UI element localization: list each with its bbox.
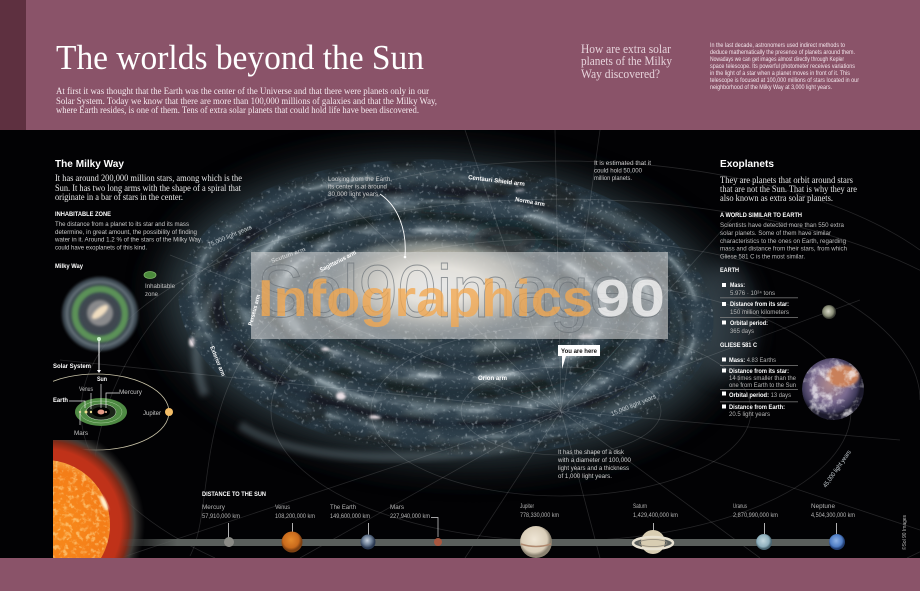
planet: Mercury: Mercury — [202, 504, 226, 511]
arm labels: Orion arm — [478, 376, 507, 382]
subheading: how are planets discovered: planets of the Milky — [581, 54, 673, 68]
heading: Exoplanets — [720, 158, 774, 170]
label: Milky Way map: Milky Way — [55, 263, 84, 270]
solar system diagram: Earth — [53, 397, 68, 404]
dark gap above galactic centre — [470, 226, 540, 254]
Earth data: Orbital period: — [730, 320, 768, 327]
subheading: how are planets discovered: How are extra solar — [581, 42, 672, 56]
inhabitable zone legend — [144, 272, 176, 298]
discovery text: Nowadays we can get images almost directly through Kepler — [710, 57, 844, 63]
planet: Venus — [275, 504, 315, 552]
panel: footer band — [0, 558, 920, 591]
planet: Neptune: Neptune — [811, 503, 836, 510]
similar world text — [720, 222, 847, 260]
pinkish star clusters — [189, 189, 594, 419]
planet: Saturn — [633, 503, 678, 554]
callout: disk shape: It has the shape of a disk — [558, 449, 625, 456]
panel: header band — [0, 0, 920, 130]
similar world text: characteristics to the ones on Earth, regarding — [720, 238, 846, 245]
panel: Exoplanets — [720, 158, 864, 420]
Gliese 581 C data: 14 times smaller than the — [729, 375, 796, 382]
planet: The Earth — [330, 504, 376, 550]
planet: Mercury — [202, 504, 240, 547]
Earth data: 150 million kilometers — [730, 309, 789, 316]
arm labels: Exterior arm — [208, 346, 226, 377]
callout: distance to centre: its center is at around — [328, 184, 387, 190]
discovery text: deduce mathematically the presence of planets around them. — [710, 50, 855, 56]
Gliese 581 C data — [720, 342, 798, 418]
solar system diagram: Venus — [79, 386, 93, 393]
planet: The Earth: The Earth — [330, 504, 357, 511]
galaxy left outer arm — [197, 250, 255, 395]
subheading: a world similar to Earth: A WORLD SIMILAR TO EARTH — [720, 212, 802, 219]
Gliese 581 C data: Distance from Earth: — [729, 404, 785, 411]
subheading: how are planets discovered: Way discovered? — [581, 67, 660, 81]
arm labels: Perseus arm — [248, 294, 262, 327]
callout: disk shape: with a diameter of 100,000 — [557, 457, 631, 464]
Earth data: Distance from its star: — [730, 301, 789, 308]
callout: you are here — [558, 345, 600, 369]
planet: Mars: 227,940,000 km — [390, 513, 430, 520]
distance ring labels: 45,000 light years — [822, 449, 853, 489]
heading: DISTANCE TO THE SUN — [202, 491, 266, 498]
label: Solar System: Solar System — [53, 363, 91, 370]
galactic centre bulge — [330, 236, 545, 332]
arm labels: Norma arm — [515, 197, 545, 208]
intro text — [56, 86, 437, 116]
intro text: where Earth resides, is one of them. Tens of extra solar planets that could hold life have been discovered. — [56, 105, 419, 116]
solar system diagram: Mercury — [119, 389, 143, 396]
icon: Gliese planet — [802, 358, 864, 420]
Earth data: EARTH — [720, 267, 739, 274]
planet: Mercury: 57,910,000 km — [202, 513, 240, 520]
distance ring labels: 75,000 light years — [207, 224, 253, 249]
solar system diagram: Jupiter — [143, 410, 161, 417]
Earth data — [720, 267, 798, 335]
callout: 50,000 million planets: could hold 50,000 — [594, 168, 642, 174]
planet: Saturn: Saturn — [633, 503, 647, 510]
discovery text: neighborhood of the Milky Way at 3,000 light years. — [710, 85, 832, 91]
solar system diagram: Mars — [74, 430, 88, 437]
Gliese 581 C data: Distance from its star: — [729, 368, 789, 375]
arm labels: Scutum arm — [271, 247, 307, 265]
subheading: how are planets discovered — [581, 42, 673, 81]
inhabitable zone text: The distance from a planet to its star and its mass — [55, 221, 190, 228]
title: The worlds beyond the Sun — [56, 38, 424, 77]
callout: disk shape: light years and a thickness — [558, 465, 630, 472]
milky way description: It has around 200,000 million stars, among which is the — [55, 173, 242, 183]
callout: distance to centre: Looking from the Earth, — [328, 176, 392, 183]
Gliese 581 C data: Orbital period: 13 days — [729, 392, 791, 399]
distance ring labels — [207, 224, 853, 489]
sun illustration — [53, 440, 143, 558]
discovery text: In the last decade, astronomers used indirect methods to — [710, 43, 846, 49]
watermark: Infographics — [258, 270, 593, 328]
planet: Uranus: 2,870,990,000 km — [733, 512, 778, 519]
planet: The Earth: 149,600,000 km — [330, 513, 370, 520]
similar world text: mass and distance from their stars, from which — [720, 246, 847, 252]
planet: Uranus — [733, 503, 778, 550]
milky way description — [55, 173, 242, 202]
planet: Saturn: 1,429,400,000 km — [633, 512, 678, 519]
watermark: 90 — [595, 270, 665, 328]
arm labels: Centauri Shield arm — [468, 175, 525, 188]
Earth data: Mass: — [730, 282, 745, 289]
callout: 50,000 million planets: million planets. — [594, 175, 632, 182]
heading: The Milky Way — [55, 158, 124, 170]
discovery text — [710, 43, 859, 91]
inhabitable zone text: determine, in great amount, the possibility of finding — [55, 229, 197, 236]
planet: Mars — [390, 504, 442, 546]
subheading: inhabitable zone: INHABITABLE ZONE — [55, 211, 111, 218]
exoplanets description: that are not the Sun. That is why they are — [720, 184, 857, 194]
planet: Venus: Venus — [275, 504, 290, 511]
similar world text: Scientists have detected more than 550 extra — [720, 222, 844, 229]
planet: Venus: 108,200,000 km — [275, 513, 315, 520]
callout: distance to centre: 30,000 light years. — [328, 191, 380, 198]
inhabitable zone text: water in it. Around 1.2 % of the stars of the Milky Way — [54, 236, 202, 244]
distance grid — [60, 130, 920, 558]
planet: Mars: Mars — [390, 504, 404, 511]
discovery text: space telescope. Its powerful photometer receives variations — [710, 64, 855, 70]
planet: Neptune: 4,504,300,000 km — [811, 512, 855, 519]
distance to the sun scale — [120, 491, 855, 558]
distance ring labels: 15,000 light years — [610, 393, 657, 418]
inhabitable zone legend: zone — [145, 291, 159, 298]
panel: Milky Way — [53, 160, 242, 450]
exoplanets description: also known as extra solar planets. — [720, 193, 833, 203]
planet: Jupiter: 778,330,000 km — [520, 512, 559, 519]
inhabitable zone text: could have exoplanets of this kind. — [55, 244, 147, 252]
callout: disk shape — [557, 449, 631, 480]
inhabitable zone text — [54, 221, 202, 252]
similar world text: Gliese 581 C is the most similar. — [720, 254, 805, 260]
callout: you are here: You are here — [561, 348, 598, 355]
Gliese 581 C data: one from Earth to the Sun — [729, 382, 796, 389]
icon: Earth planet — [822, 305, 836, 319]
callout: disk shape: of 1,000 light years. — [558, 473, 612, 480]
Gliese 581 C data: GLIESE 581 C — [720, 342, 757, 349]
callout: 50,000 million planets — [594, 160, 651, 182]
inhabitable zone legend: Inhabitable — [145, 283, 176, 290]
copyright: ©Sol 90 Images — [901, 515, 908, 550]
exoplanets description: They are planets that orbit around stars — [720, 175, 853, 185]
milky way description: Sun. It has two long arms with the shape of a spiral that — [55, 183, 241, 193]
arm labels: Sagittarius arm — [319, 250, 358, 274]
Gliese 581 C data: 20.5 light years — [729, 411, 770, 418]
galaxy illustration — [151, 138, 757, 482]
callout: 50,000 million planets: It is estimated that it — [594, 160, 651, 167]
milky way description: originate in a bar of stars in the center. — [55, 192, 183, 202]
watermark: Sol90images — [257, 250, 663, 333]
intro text: Solar System. Today we know that there are more than 100,000 millions of galaxies and that the Milky Way, — [56, 96, 437, 107]
Earth data: 5.976 · 10²⁴ tons — [730, 290, 775, 297]
Earth data: 365 days — [730, 328, 754, 335]
discovery text: telescope is focused at 100,000 millions of stars located in our — [710, 78, 859, 84]
arm labels — [208, 175, 545, 382]
similar world text: solar planets. Some of them have similar — [720, 230, 832, 237]
inset milky way map — [62, 277, 138, 373]
exoplanets description — [720, 175, 857, 203]
planet: Jupiter — [520, 503, 559, 558]
planet: Neptune — [811, 503, 855, 550]
planet: Jupiter: Jupiter — [520, 503, 534, 510]
intro text: At first it was thought that the Earth was the center of the Universe and that there were planets only in our — [56, 86, 430, 97]
planet: Uranus: Uranus — [733, 503, 747, 510]
discovery text: in the light of a star when a planet moves in front of it. This — [710, 71, 850, 77]
Gliese 581 C data: Mass: 4.83 Earths — [729, 357, 776, 364]
scale bar — [120, 539, 836, 546]
solar system diagram: Sun — [97, 376, 107, 383]
callout: distance to centre — [328, 176, 406, 258]
solar system diagram — [53, 374, 173, 450]
